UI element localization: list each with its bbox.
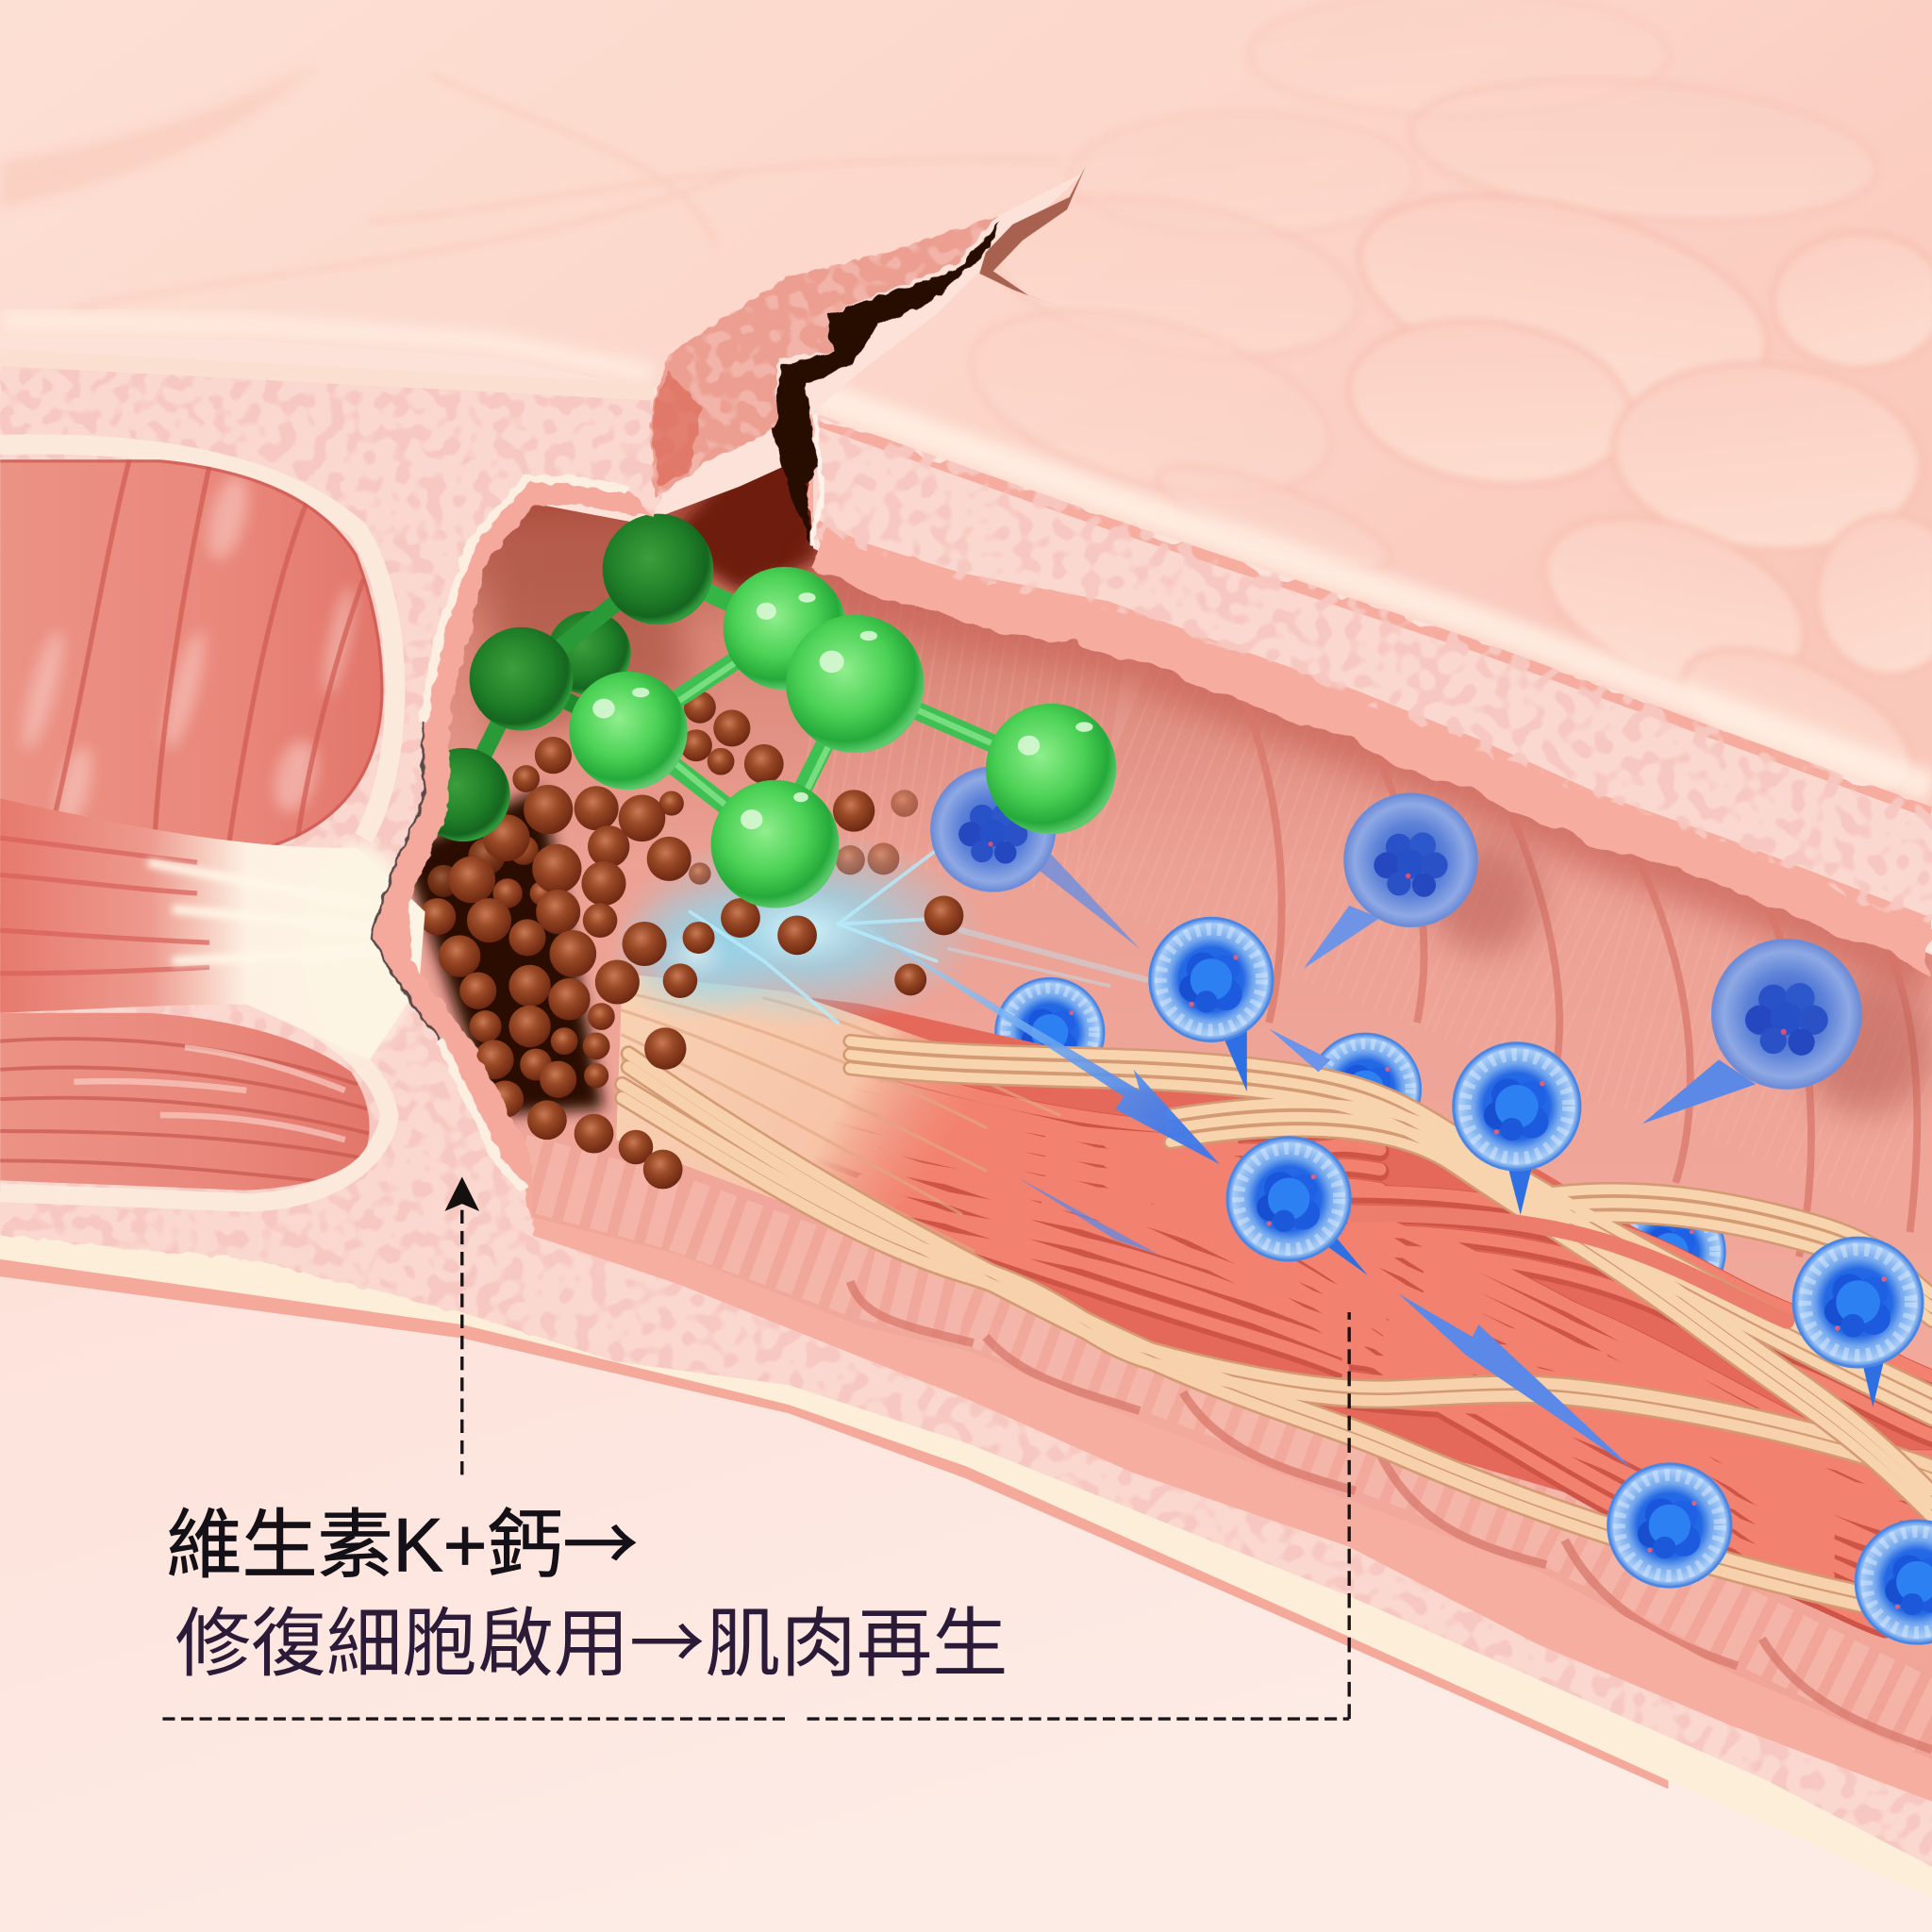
text: line two: 修復細胞啟用→肌肉再生 bbox=[175, 1583, 1008, 1692]
torn skin flap bbox=[647, 209, 1004, 506]
callout text bbox=[166, 1484, 1008, 1692]
muscle bundle: lower left bbox=[0, 1004, 382, 1195]
torn wound rim bbox=[371, 478, 653, 1220]
energy glow bbox=[610, 832, 1146, 1029]
muscle fibre bundle bbox=[616, 974, 1932, 1629]
torn crack in skin bbox=[774, 166, 1086, 544]
blue repair cells bbox=[850, 768, 1932, 1643]
cell shadows bbox=[1428, 841, 1932, 1115]
dashed callout frame line bbox=[162, 1312, 1349, 1719]
brown calcium particles bbox=[419, 691, 963, 1189]
panel: lower tissue wall bbox=[0, 1171, 1932, 1909]
green molecule bbox=[416, 514, 1116, 908]
muscle bundle: upper left bbox=[0, 459, 384, 845]
panel: muscle cavity interior bbox=[370, 431, 1932, 1824]
text: line one: 維生素K+鈣→ bbox=[166, 1484, 639, 1593]
panel: upper dermis layer bbox=[801, 407, 1932, 974]
muscle bundle: middle tendon bbox=[0, 798, 425, 1059]
left dermis tissue bbox=[0, 351, 672, 1337]
panel: upper skin surface bbox=[0, 0, 1932, 824]
cells behind the muscle fibres bbox=[995, 978, 1725, 1307]
arrow: dashed leader up to wound bbox=[445, 1176, 479, 1474]
panel: left dermis with muscle bundles bbox=[0, 351, 672, 1337]
